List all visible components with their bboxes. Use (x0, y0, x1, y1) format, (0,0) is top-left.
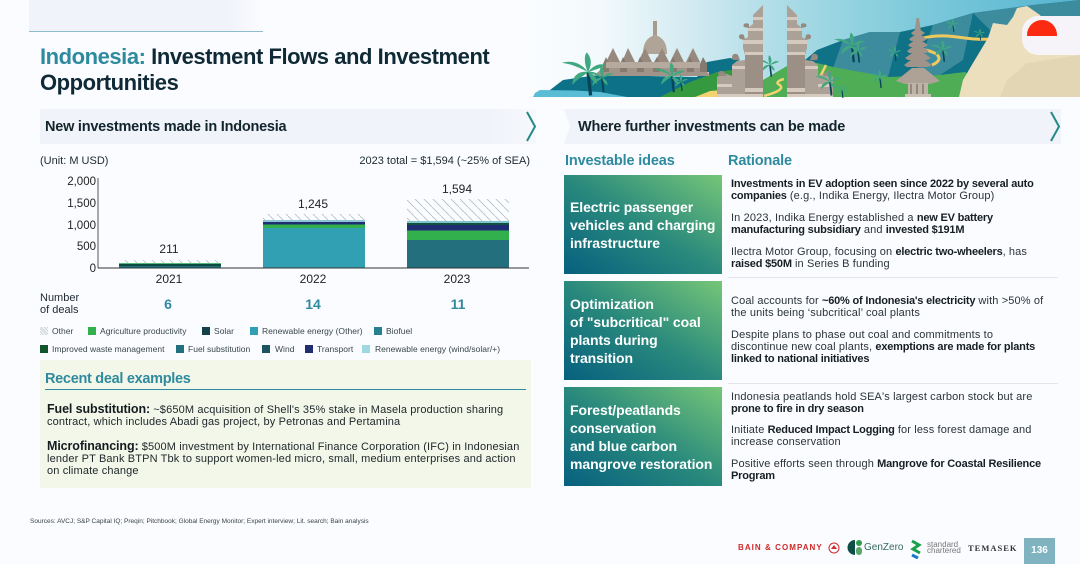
section header text: New investments made in Indonesia (45, 119, 286, 135)
icon: palm trees (562, 19, 985, 95)
chevron arrow (1050, 112, 1060, 142)
microfinancing deal: lender PT Bank BTPN Tbk to support women-led micro, small, medium enterprises and action (47, 453, 516, 465)
legend: Solar (214, 326, 234, 336)
idea card: forest and mangrove: conservation (570, 420, 656, 436)
total label: 2023 total = $1,594 (~25% of SEA) (359, 155, 530, 167)
column heading: rationale: Rationale (728, 153, 792, 169)
column heading: investable ideas: Investable ideas (565, 153, 675, 169)
Standard Chartered text (927, 540, 961, 555)
rationale: forest and mangrove: prone to fire in dry season (731, 403, 864, 415)
rationale: forest and mangrove: Initiate Reduced Impact Logging for less forest damage and (731, 424, 1031, 436)
rationale: electric vehicles: Investments in EV adoption seen since 2022 by several auto (731, 178, 1034, 190)
row label: Number (40, 292, 79, 304)
icon: pagoda (896, 18, 940, 97)
logo: Bain & Company: BAIN & COMPANY (738, 543, 823, 552)
legend: Biofuel (386, 326, 412, 336)
legend: Agriculture productivity (100, 326, 186, 336)
section header: new investments (40, 109, 536, 144)
stacked bar chart: 2021 (156, 272, 183, 286)
fuel substitution deal: contract, which includes Abadi gas project, by Petronas and Pertamina (47, 416, 400, 428)
title: Opportunities (40, 70, 178, 95)
idea card: subcritical coal: of "subcritical" coal (570, 314, 701, 330)
legend: Improved waste management (52, 344, 164, 354)
fuel substitution deal (47, 402, 503, 428)
idea card: electric vehicles: Electric passenger (570, 199, 693, 215)
chevron arrow (526, 112, 536, 142)
rationale: forest and mangrove: increase conservation (731, 436, 841, 448)
idea card: subcritical coal: Optimization (570, 296, 654, 312)
rationale: forest and mangrove: Indonesia peatlands hold SEA's largest carbon stock but are (731, 391, 1032, 403)
bar: 2021 (119, 242, 221, 268)
footer logos (738, 540, 1018, 559)
logo: Temasek: TEMASEK (968, 543, 1018, 553)
Standard Chartered text: chartered (927, 546, 961, 555)
rationale: subcritical coal: linked to national initiatives (731, 353, 869, 365)
rationale: subcritical coal: discontinue new coal plants, exemptions are made for plants (731, 341, 1035, 353)
rationale: forest and mangrove: Positive efforts seen through Mangrove for Coastal Resilience (731, 458, 1041, 470)
idea card: electric vehicles: infrastructure (570, 235, 660, 251)
legend: Renewable energy (Other) (262, 326, 363, 336)
idea card: subcritical coal: transition (570, 350, 633, 366)
Standard Chartered text: standard (927, 540, 958, 549)
rationale: electric vehicles: companies (e.g., Indika Energy, Ilectra Motor Group) (731, 190, 994, 202)
title: Indonesia: Investment Flows and Investment (40, 44, 489, 69)
rationale: electric vehicles: raised $50M in Series B funding (731, 258, 890, 270)
rationale: subcritical coal (731, 295, 1044, 365)
idea card: forest and mangrove (564, 387, 722, 486)
deal counts (164, 296, 466, 312)
rationale: subcritical coal: Coal accounts for ~60% of Indonesia's electricity with >50% of (731, 295, 1043, 307)
bar: 2022 (263, 197, 365, 268)
deal counts: 14 (305, 296, 321, 312)
stacked bar chart: 2022 (300, 272, 327, 286)
logo: Bain icon (828, 542, 840, 554)
stacked bar chart: 2,000 (67, 176, 96, 188)
rationale: electric vehicles: Ilectra Motor Group, focusing on electric two-wheelers, has (731, 246, 1027, 258)
stacked bar chart: 1,000 (67, 220, 96, 232)
microfinancing deal (47, 439, 519, 477)
rationale: forest and mangrove (731, 391, 1041, 482)
stacked bar chart: 0 (90, 263, 96, 275)
banner illustration: Indonesian landscape (533, 0, 1080, 98)
legend: Transport (317, 344, 353, 354)
title (40, 44, 490, 95)
top left tab with rule (29, 0, 263, 32)
idea card: electric vehicles (564, 175, 722, 274)
fuel substitution deal: Fuel substitution: ~$650M acquisition of Shell's 35% stake in Masela production sharing (47, 402, 503, 416)
section header text: Where further investments can be made (578, 119, 845, 135)
idea card: subcritical coal (564, 281, 722, 380)
row label: of deals (40, 304, 79, 316)
panel: recent deal examples (40, 360, 531, 488)
microfinancing deal: on climate change (47, 465, 139, 477)
section header: further investments (564, 109, 1061, 144)
idea card: subcritical coal: plants during (570, 332, 658, 348)
microfinancing deal: Microfinancing: $500M investment by International Finance Corporation (IFC) in Indonesian (47, 439, 519, 453)
rationale: subcritical coal: Despite plans to phase out coal and commitments to (731, 329, 993, 341)
sources: Sources: AVCJ; S&P Capital IQ; Preqin; Pitchbook; Global Energy Monitor; Expert interview; Lit. search; Bain analysis (30, 518, 369, 525)
stacked bar chart: 500 (77, 241, 96, 253)
stacked bar chart (67, 176, 529, 286)
page number (1024, 538, 1055, 564)
stacked bar chart: 1,500 (67, 198, 96, 210)
legend: Fuel substitution (188, 344, 250, 354)
idea card: forest and mangrove: Forest/peatlands (570, 402, 681, 418)
legend (40, 326, 500, 354)
bar: 2023 (407, 182, 509, 268)
flag of Indonesia (1022, 16, 1080, 55)
idea card: forest and mangrove: mangrove restoration (570, 456, 712, 472)
legend: Renewable energy (wind/solar/+) (375, 344, 500, 354)
bar: 2023: 1,594 (442, 182, 472, 196)
number of deals row (40, 292, 466, 316)
icon: cliff (959, 6, 1080, 97)
deal counts: 11 (451, 296, 465, 312)
rationale: subcritical coal: the units being ‘subcritical’ coal plants (731, 307, 920, 319)
bar: 2021: 211 (159, 242, 179, 256)
unit label: (Unit: M USD) (40, 155, 108, 167)
GenZero text: GenZero (864, 542, 903, 553)
logo: GenZero (848, 540, 862, 555)
rationale: electric vehicles (731, 178, 1034, 270)
icon: Borobudur temple (595, 21, 710, 76)
legend: Wind (275, 344, 294, 354)
deal counts: 6 (164, 296, 172, 312)
heading: recent deal examples: Recent deal examples (45, 371, 191, 387)
rationale: electric vehicles: manufacturing subsidiary and invested $191M (731, 224, 964, 236)
logo: Standard Chartered icon (910, 540, 922, 559)
bar: 2022: 1,245 (298, 197, 328, 211)
legend: Other (52, 326, 73, 336)
rationale: forest and mangrove: Program (731, 470, 775, 482)
stacked bar chart: 2023 (444, 272, 471, 286)
page number: 136 (1031, 545, 1048, 556)
icon: split gate (717, 5, 833, 97)
rationale: electric vehicles: In 2023, Indika Energy established a new EV battery (731, 212, 993, 224)
idea card: electric vehicles: vehicles and charging (570, 217, 715, 233)
idea card: forest and mangrove: and blue carbon (570, 438, 677, 454)
row label (40, 292, 79, 316)
